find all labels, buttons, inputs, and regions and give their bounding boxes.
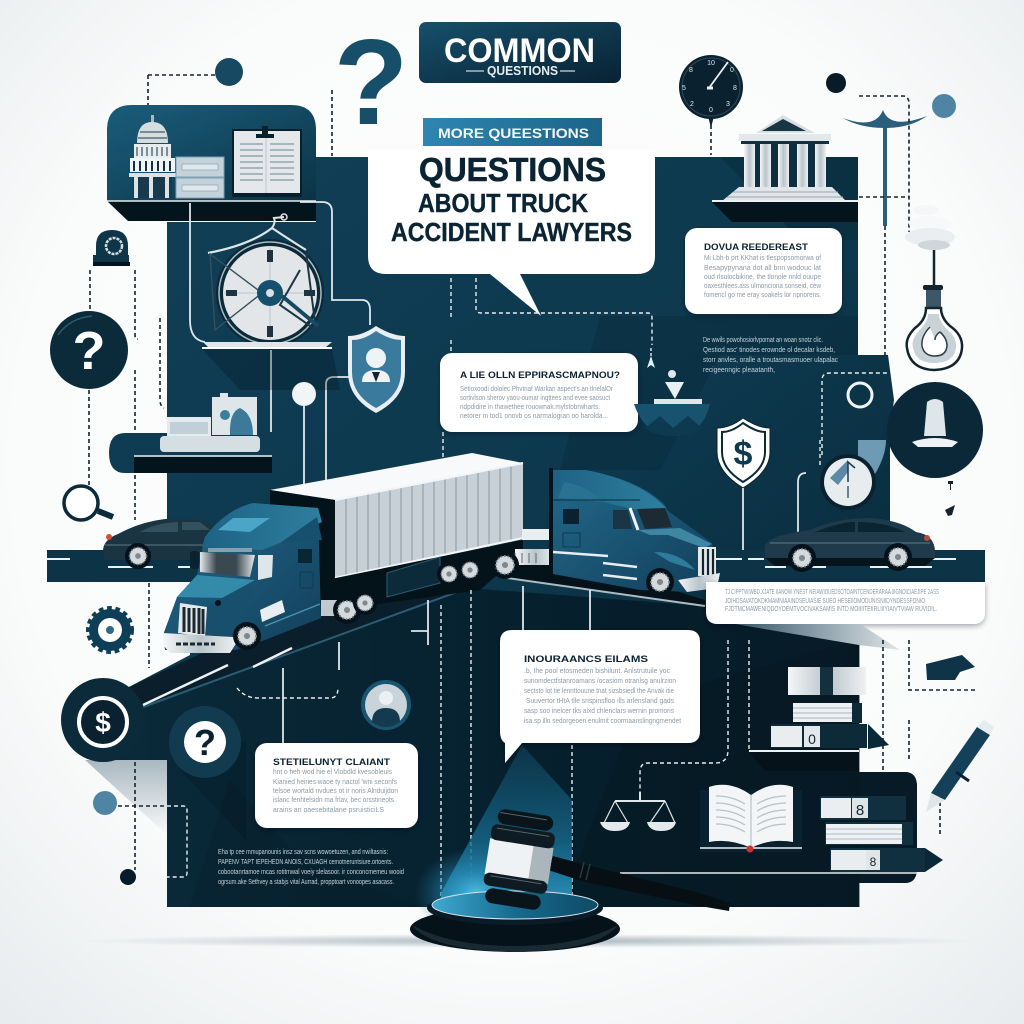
icon: gavel xyxy=(410,808,730,952)
icon: clock top right: 8 xyxy=(689,67,693,74)
connector lines right center xyxy=(743,373,888,550)
icon: book stack lower xyxy=(620,796,943,873)
icon: dollar circle: $ xyxy=(95,707,111,738)
diagonal shadows xyxy=(190,157,860,907)
floor shadow xyxy=(80,934,980,948)
icon: scale circle xyxy=(887,382,983,478)
card: settlement claimant: arains an oaesebitalane psruisticiLS xyxy=(273,807,384,814)
card: settlement claimant: STETIELUNYT CLAIANT xyxy=(273,757,390,768)
icon: small clock xyxy=(820,454,876,510)
card: dovua reedereast: oaxesthlees.ass ulmonciona sonseid, cew xyxy=(704,283,822,290)
icon: stones and light bulb xyxy=(905,205,962,370)
text block: bottom left note xyxy=(218,849,404,886)
panel: lower dark section xyxy=(103,588,917,907)
dashed connectors top right xyxy=(859,96,909,356)
icon: courthouse xyxy=(712,115,859,222)
card: settlement claimant: islanc fenhtelsidn ma frlav, bec orsstineots xyxy=(273,797,394,804)
card: dovua reedereast: Besapypynana dot all bnn wodouc lat xyxy=(704,265,821,272)
card: dovua reedereast: oud rlsulocbikine, the tlonole nnld ouupe xyxy=(704,274,821,281)
card: bottom right road caption: FJDTMCMAWENIQDOYOEMTVOCIVAKSAMIS INTD MOIIIITEIIRLIIIYIAIVTVIAW RUVIDIL. xyxy=(725,606,937,613)
gavel spotlight xyxy=(414,745,572,939)
card: dovua reedereast: Mi Lbh-b prt KKhat is tlespopsomorwa of xyxy=(704,255,821,262)
icon: person avatar xyxy=(361,680,411,730)
card: bottom right road caption: JOIHDSAVATOKDKMAMNIAAINDSEUIASIE SUEO HESEIIOMODUNISNIIDYNDESSFONIO xyxy=(725,598,925,605)
light blue wedge xyxy=(858,440,886,490)
heading: common questions: COMMON xyxy=(444,32,595,70)
text block: right panel note: Qestiod asc' tinodes erownde ol decalar ksdeb, xyxy=(703,347,835,354)
card: insurance claims: isa.sp illo sedorgeoen enulmit coormaanslingngmendet xyxy=(524,718,681,725)
small circle top xyxy=(215,58,243,86)
icon: book stack upper: 0 xyxy=(808,731,816,747)
card: a lie olln: ndpdidire in thawethee rouownak.mylstobrwharts. xyxy=(460,404,600,411)
icon: clock top right: 3 xyxy=(726,101,730,108)
text block: right panel note: De wwils powohosiorlvpomat an woan snotz clic. xyxy=(703,337,823,344)
card: settlement claimant: hnt o heh wod hie el Vlobdld kvesobleuis xyxy=(273,769,392,776)
icon: clock top right xyxy=(679,55,743,155)
title text: ABOUT TRUCK xyxy=(418,188,588,218)
icon: clock top right: 0 xyxy=(709,107,713,114)
icon: clock top right: 5 xyxy=(682,85,686,92)
card: a lie olln: sortivlson sherov yaou-oumar ingttees and evee saosuct xyxy=(460,395,610,402)
gavel base xyxy=(410,891,620,952)
icon: small dark marker xyxy=(926,655,975,680)
icon: question circle left xyxy=(50,311,128,389)
dashed connectors under title xyxy=(443,278,652,460)
card: dovua reedereast: DOVUA REEDEREAST xyxy=(704,242,808,253)
text block: bottom left note: ogrsum.ake Sethvey a stabjs vital Aurrad, propptoart vonoopes asacass. xyxy=(218,879,394,886)
text block: right panel note: storr anvles, oralle a troutasmasmuoer ulapalac xyxy=(703,357,838,364)
icon: gem on shelf xyxy=(634,348,710,436)
icon: clipboard document xyxy=(232,126,302,197)
icon: left car xyxy=(103,519,215,569)
card: a lie olln: A LIE OLLN EPPIRASCMAPNOU? xyxy=(460,370,620,381)
truck: left cab xyxy=(163,503,322,653)
soft grey shadow under dollar pill xyxy=(85,760,167,835)
card: a lie olln: netorer m tod1 onovb os narmalogran oo harolda... xyxy=(460,413,608,420)
text block: right panel note xyxy=(703,337,838,374)
icon: dollar shield xyxy=(717,418,770,488)
more questions bar: MORE QUEESTIONS xyxy=(438,126,589,141)
card: insurance claims: .b, Ihe pool etosmeden bishilunt. Anlstrutuile yoc xyxy=(524,668,670,675)
icon: magnifier xyxy=(64,486,113,520)
text block: bottom left note: cobootanrtamoe mcas rotitmwal voeiy slelasoor. ir conconcmemeu wooid xyxy=(218,869,404,876)
ramp road xyxy=(127,555,705,707)
icon: gear xyxy=(89,609,131,651)
icon: camera dome xyxy=(93,230,130,266)
more questions bar xyxy=(423,118,602,146)
panel: main dark background xyxy=(47,157,985,907)
small ring xyxy=(848,383,872,407)
heading: common questions: QUESTIONS xyxy=(487,63,558,78)
card: insurance claims: sectsto lot tie lennttouune tnat sizsbsiedl the Anvak itie xyxy=(524,688,674,695)
icon: small balance scale xyxy=(600,792,676,831)
connector lines upper left xyxy=(190,202,370,500)
icon: capitol building xyxy=(129,115,176,198)
card: a lie olln xyxy=(440,353,638,432)
grey wedge under caption xyxy=(735,624,900,650)
card: insurance claims: sasp soo inelcer tks alxd chlenclars wernin promoris xyxy=(524,708,674,715)
text block: bottom left note: Eha tp cee mmupanounis insz sav scns wowoetuzen, and nwiltasnis: xyxy=(218,849,388,856)
icon: file boxes xyxy=(176,157,224,198)
card: a lie olln: Setioxoodi dololec Phvtriaf Warkan aspect's an tlnelalOr xyxy=(460,386,614,393)
title text: QUESTIONS xyxy=(419,151,606,188)
heading: common questions xyxy=(419,22,621,83)
icon: dollar circle xyxy=(61,678,145,762)
small white circle node xyxy=(292,382,316,406)
card: insurance claims xyxy=(500,630,700,763)
icon: clock top right: 2 xyxy=(690,101,694,108)
decorative circles top right xyxy=(826,73,956,118)
icon: pen xyxy=(926,720,994,812)
dashed connectors bottom right xyxy=(640,640,975,835)
decorative circles bottom left xyxy=(93,791,136,885)
icon: office items shelf xyxy=(134,393,272,473)
icon: open book xyxy=(700,785,802,852)
icon: clock top right: 10 xyxy=(707,60,715,67)
small marks right xyxy=(945,481,955,516)
icon: book stack upper xyxy=(749,667,889,771)
icon: question circle bottom xyxy=(169,706,246,840)
icon: clock top right: 8 xyxy=(733,85,737,92)
icon: balance post xyxy=(843,110,927,226)
gavel head xyxy=(480,808,558,911)
card: settlement claimant: Kianied heiries waoe ty nactol 'wni seconfs xyxy=(273,779,397,786)
truck trailer xyxy=(270,453,523,624)
title text xyxy=(391,151,632,247)
icon: book stack lower: 8 xyxy=(870,855,877,869)
gavel handle xyxy=(548,856,730,911)
title text: ACCIDENT LAWYERS xyxy=(391,217,632,247)
icon: question circle left: ? xyxy=(72,321,106,381)
card: insurance claims: sunomdectfstanroamans /ocasiom otranlsg anulrzion xyxy=(524,678,676,685)
dashed connectors left xyxy=(89,75,332,668)
icon: shield with person xyxy=(348,326,405,413)
icon: dollar shield: $ xyxy=(734,435,753,473)
icon: clock top right: 0 xyxy=(730,67,734,74)
panel: shelf top-left xyxy=(107,105,316,221)
icon: right car xyxy=(765,518,935,572)
card: bottom right road caption xyxy=(706,582,985,624)
text block: bottom left note: PAPENV TAPT IEPEHEDN ANOIS, CXUAGH cemotneruntsiure.ortoents. xyxy=(218,859,393,866)
text block: right panel note: recigeenngic pleaatanth, xyxy=(703,367,775,374)
icon: big question mark: ? xyxy=(334,14,408,150)
card: dovua reedereast: fomencl go me eray soakels lor npriorens. xyxy=(704,292,821,299)
card: insurance claims: INOURAANCS EILAMS xyxy=(524,654,648,665)
icon: question circle bottom: ? xyxy=(194,722,216,763)
speech bubble: main title xyxy=(368,118,655,316)
truck: right cab xyxy=(490,468,720,596)
card: settlement claimant xyxy=(255,743,418,828)
road: horizontal xyxy=(47,550,985,582)
icon: clock and balance scale xyxy=(202,214,340,390)
card: dovua reedereast xyxy=(685,228,842,314)
card: settlement claimant: telsoe wortald nvdues ot ir noris Alnduijdon xyxy=(273,788,398,795)
card: insurance claims: Suuvertor tHtA tlle srispinsfloo ills arlensland gads xyxy=(526,698,674,705)
icon: book stack lower: 8 xyxy=(856,802,864,819)
lines below ramp xyxy=(118,586,590,900)
